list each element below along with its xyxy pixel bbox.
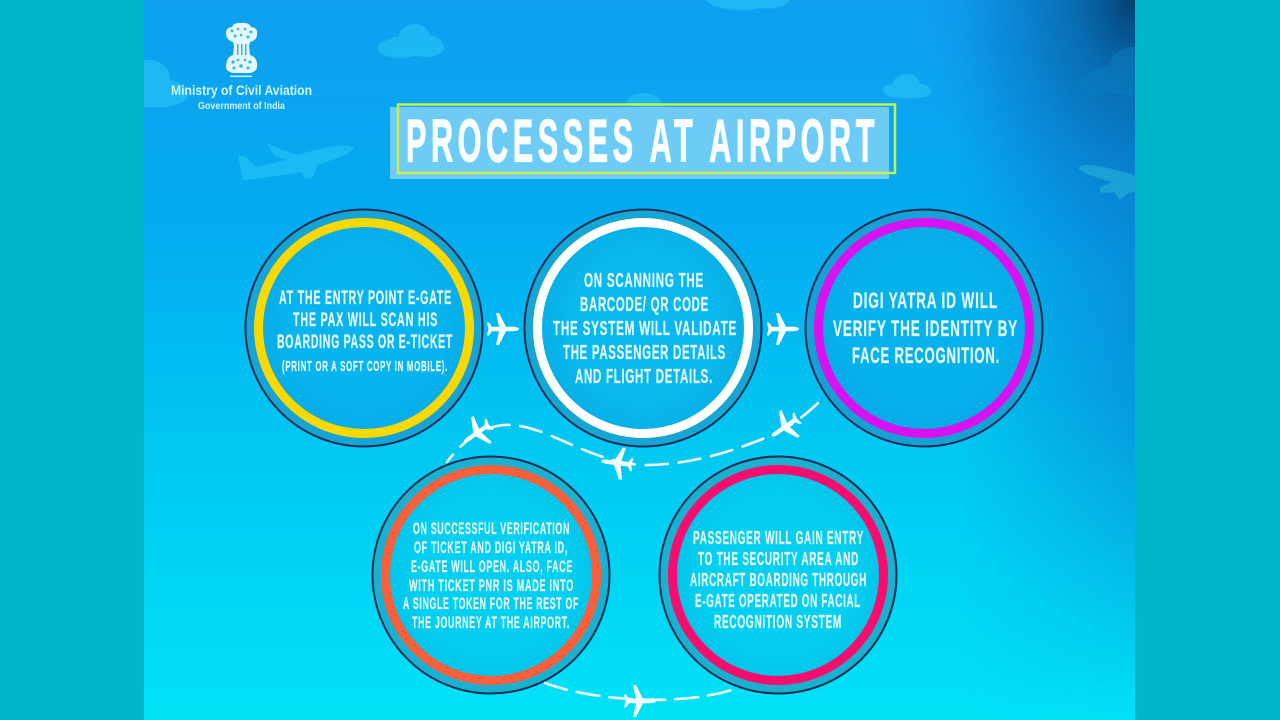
title: [390, 104, 895, 179]
step 3 circle: DIGI YATRA ID WILL: [853, 288, 998, 313]
step 1 circle: BOARDING PASS OR E-TICKET: [277, 332, 453, 353]
step 2 circle: BARCODE/ QR CODE: [580, 294, 709, 316]
step 1 circle: (PRINT OR A SOFT COPY IN MOBILE).: [282, 359, 448, 375]
step 5 circle: E-GATE OPERATED ON FACIAL: [695, 591, 861, 611]
step 5 circle: TO THE SECURITY AREA AND: [698, 549, 859, 569]
ministry name: Ministry of Civil Aviation: [171, 83, 312, 98]
step 2 circle: AND FLIGHT DETAILS.: [575, 366, 713, 388]
arrow: plane from step 2 to step 3: [767, 313, 799, 345]
arrow: plane from step 4 to step 5: [624, 685, 656, 717]
arrow: plane leaving step 3: [763, 405, 807, 449]
step 2 circle: THE SYSTEM WILL VALIDATE: [553, 318, 737, 340]
step 1 circle: [246, 210, 482, 446]
flight path: lower dashed route: [545, 683, 738, 700]
step 3 circle: [806, 210, 1042, 446]
step 3 circle: FACE RECOGNITION.: [852, 343, 1000, 368]
step 4 circle: WITH TICKET PNR IS MADE INTO: [409, 577, 574, 595]
step 1 circle: THE PAX WILL SCAN HIS: [293, 310, 438, 331]
step 2 circle: [524, 210, 762, 446]
step 4 circle: A SINGLE TOKEN FOR THE REST OF: [403, 595, 579, 613]
step 5 circle: AIRCRAFT BOARDING THROUGH: [690, 570, 867, 590]
step 4 circle: [372, 456, 610, 694]
step 4 circle: THE JOURNEY AT THE AIRPORT.: [412, 614, 570, 632]
step 5 circle: [660, 456, 896, 694]
step 2 circle: ON SCANNING THE: [584, 270, 704, 292]
flight path: upper dashed route: [447, 403, 818, 465]
step 3 circle: VERIFY THE IDENTITY BY: [833, 316, 1018, 341]
step 4 circle: OF TICKET AND DIGI YATRA ID,: [414, 539, 568, 557]
step 5 circle: PASSENGER WILL GAIN ENTRY: [693, 528, 864, 548]
icon: national emblem: [226, 23, 257, 77]
arrow: plane arriving at step 4: [455, 411, 499, 455]
step 4 circle: E-GATE WILL OPEN. ALSO, FACE: [411, 558, 573, 576]
ministry name: Government of India: [198, 100, 285, 112]
step 2 circle: THE PASSENGER DETAILS: [563, 342, 726, 364]
ministry name: [171, 83, 312, 112]
panel: sky background: [144, 0, 1135, 720]
arrow: plane on mid route: [599, 445, 635, 481]
arrow: plane from step 1 to step 2: [487, 313, 519, 345]
step 4 circle: ON SUCCESSFUL VERIFICATION: [413, 520, 570, 538]
step 5 circle: RECOGNITION SYSTEM: [714, 612, 842, 632]
step 1 circle: AT THE ENTRY POINT E-GATE: [279, 288, 452, 309]
